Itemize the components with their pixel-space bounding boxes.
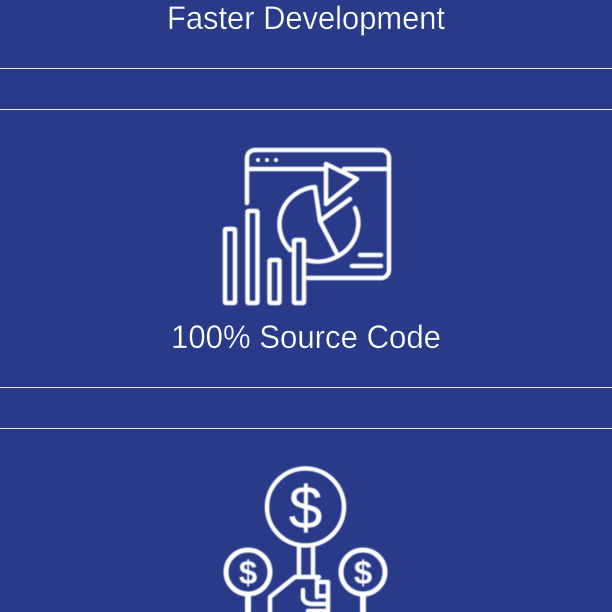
- pie chart right slice: [320, 199, 358, 256]
- large coin: [267, 468, 344, 546]
- bar chart: [225, 211, 304, 303]
- icon: browser window with charts: [225, 150, 389, 303]
- large dollar sign: $: [289, 474, 322, 541]
- left dollar sign: $: [239, 554, 257, 591]
- window header line: [247, 167, 389, 171]
- window text lines: [352, 255, 381, 266]
- left coin: [226, 550, 270, 594]
- window header dots: [256, 158, 278, 162]
- large coin stem: [299, 546, 313, 575]
- hand: [270, 577, 328, 612]
- right dollar sign: $: [354, 554, 372, 591]
- label: 100% Source Code: 100% Source Code: [171, 319, 441, 355]
- right coin: [341, 550, 385, 594]
- icon: hand holding dollar coins: [226, 468, 385, 612]
- pie chart main slice: [279, 187, 338, 262]
- pie slice: triangle: [326, 164, 357, 204]
- left coin stem: [245, 595, 251, 612]
- heading: Faster Development: Faster Development: [167, 0, 445, 36]
- browser window frame: [247, 150, 389, 278]
- right coin stem: [360, 595, 366, 612]
